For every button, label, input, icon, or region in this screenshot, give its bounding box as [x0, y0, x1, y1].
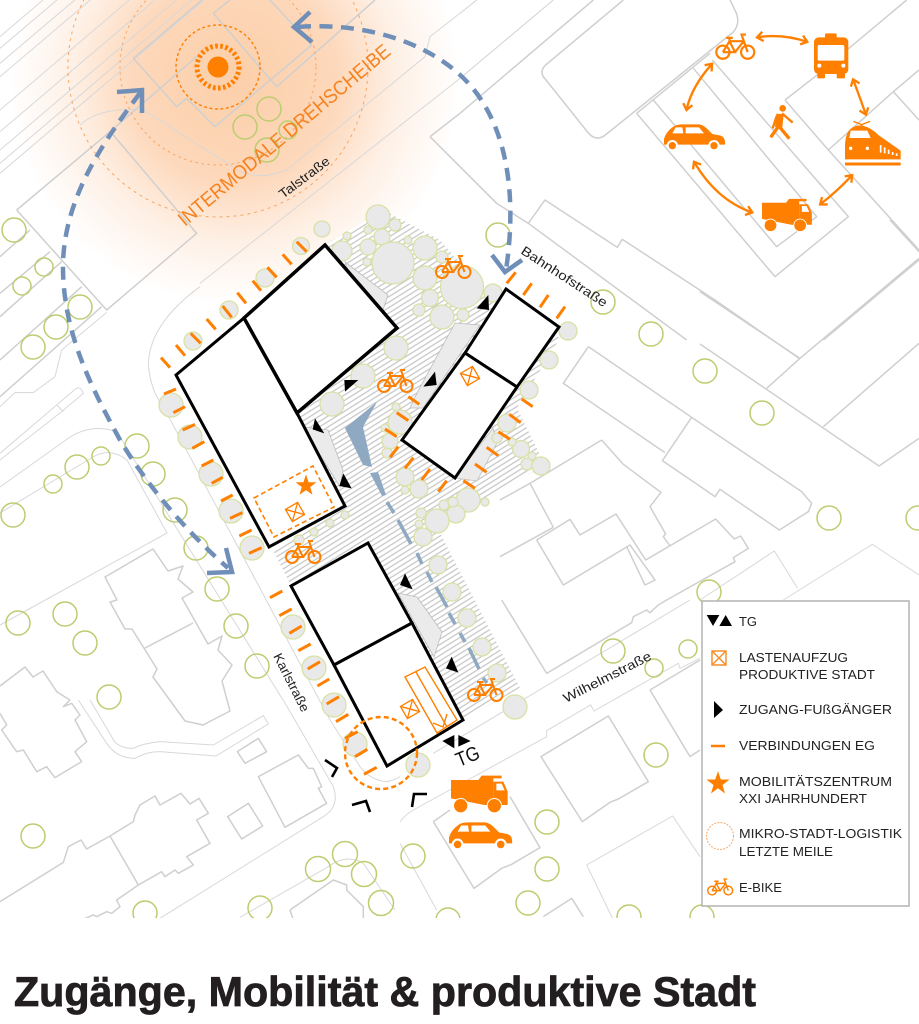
mobility exchange circle [664, 33, 901, 232]
water feature and blue dashed path [345, 402, 487, 683]
street label Bahnhofstraße: Bahnhofstraße [518, 243, 610, 310]
building left [176, 318, 345, 547]
icon: pedestrian [771, 105, 793, 139]
icon: freight lift, building left [285, 502, 305, 522]
houses west of Karlstraße [0, 549, 232, 725]
street label Karlstraße: Karlstraße [270, 651, 313, 714]
legend label: pedestrian access: ZUGANG-FUßGÄNGER [739, 702, 892, 717]
exchange arrows [687, 36, 866, 212]
legend icon: connection dash [711, 745, 725, 747]
square trees: grey filled circles [159, 205, 577, 777]
legend icon: star [706, 771, 730, 794]
legend icon: TG triangles [707, 615, 732, 626]
car icon [449, 822, 512, 850]
legend label: logistics: MIKRO-STADT-LOGISTIK [739, 826, 902, 841]
building bottom upper [291, 543, 412, 665]
building bottom lower [334, 623, 463, 766]
legend label: logistics: LETZTE MEILE [739, 844, 833, 859]
building right upper [465, 289, 559, 387]
underground garage ramp [405, 667, 457, 733]
orange glow of the intermodal hub [0, 0, 470, 320]
entrance canopies: light grey shapes [303, 262, 497, 657]
hub: concentric orange circles [68, 0, 368, 217]
icon: freight lift, building bottom [400, 699, 420, 719]
hatched public square [273, 210, 560, 720]
icon: star mobility centre [296, 474, 316, 495]
icon: truck [762, 199, 812, 232]
legend icon: e-bike [708, 879, 733, 895]
legend label: mobility centre: MOBILITÄTSZENTRUM [739, 774, 892, 789]
e-bike icon, square centre [378, 370, 412, 392]
orange ground floor connection dashes [161, 242, 565, 774]
blue dashed arrow: Karlstraße to hub [63, 90, 232, 573]
legend label: freight lift: LASTENAUFZUG [739, 650, 848, 665]
title: Zugänge, Mobilität & produktive Stadt [14, 968, 756, 1015]
truck icon [451, 776, 508, 813]
TG label: TG [453, 742, 483, 772]
street label Talstraße: Talstraße [276, 153, 333, 201]
heading: intermodal hub: INTERMODALE DREHSCHEIBE [174, 40, 395, 231]
road and plot west of Karlstraße [0, 428, 283, 700]
e-bike icon, square west [286, 541, 320, 563]
legend icon: logistics circle [706, 822, 734, 850]
legend label: e-bike: E-BIKE [739, 880, 782, 895]
e-bike icon, square north [436, 256, 470, 278]
blue dashed arrow: hub to Bahnhofstraße [294, 12, 522, 272]
TG entrance triangles [442, 735, 471, 748]
panel: legend [702, 601, 909, 906]
street label Wilhelmstraße: Wilhelmstraße [561, 648, 654, 706]
legend icon: pedestrian access [714, 701, 723, 718]
icon: car [664, 124, 725, 151]
legend label: freight lift: PRODUKTIVE STADT [739, 667, 875, 682]
icon: bus [814, 33, 848, 78]
icon: train [845, 121, 901, 164]
e-bike icon, square south [468, 679, 502, 701]
legend label: mobility centre [739, 774, 892, 806]
legend label: connections: VERBINDUNGEN EG [739, 738, 875, 753]
black pedestrian access triangles [313, 295, 489, 673]
building top [244, 245, 397, 413]
icon: bicycle [716, 35, 754, 59]
legend label: mobility centre: XXI JAHRHUNDERT [739, 791, 867, 806]
legend label: logistics [739, 826, 902, 859]
mobility centre dashed area [254, 466, 334, 537]
legend label: freight lift [739, 650, 875, 682]
legend label: TG: TG [739, 614, 757, 629]
building right lower [402, 353, 517, 478]
icon: freight lift, building right [460, 366, 480, 386]
legend icon: freight lift [712, 651, 726, 665]
black corner chevrons [325, 760, 427, 812]
micro city logistics circle [345, 717, 417, 789]
